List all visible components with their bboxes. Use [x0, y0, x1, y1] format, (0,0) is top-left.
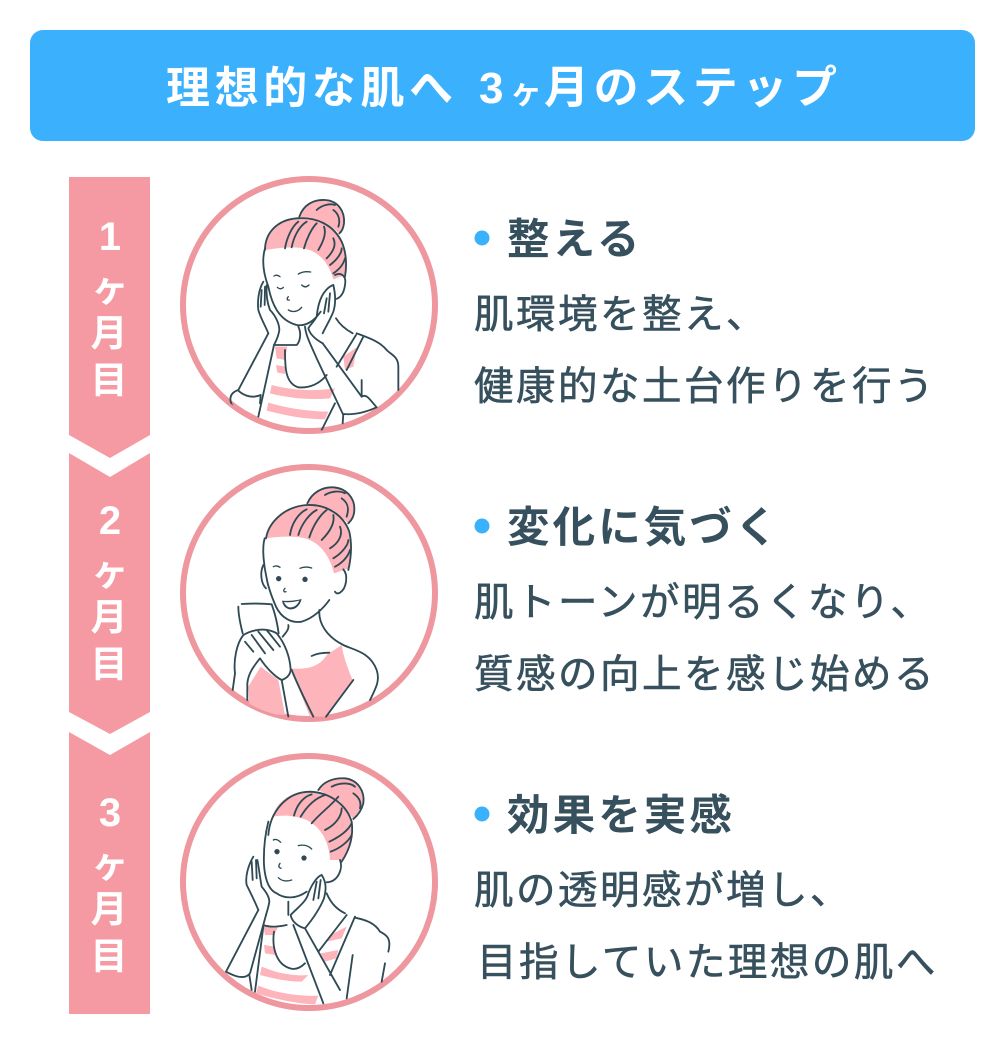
title text: 月のステップ [544, 62, 842, 113]
bullet [474, 230, 490, 246]
timeline arrow: month 3: 月 [90, 889, 128, 930]
timeline arrow: month 1: ヶ [92, 268, 128, 309]
timeline arrow: month 1: 1 [99, 215, 121, 259]
description: 肌環境を整え、 [474, 293, 768, 337]
description: 肌トーンが明るくなり、 [474, 581, 932, 625]
illustration: woman smiling at smartphone [183, 467, 435, 719]
bullet [474, 806, 490, 822]
illustration: woman with eyes closed touching cheeks [183, 179, 435, 431]
timeline arrow: month 2: 月 [90, 597, 128, 638]
timeline arrow: month 2 [69, 453, 150, 734]
timeline arrow: month 3: 目 [90, 936, 128, 977]
timeline arrow: month 2: ヶ [92, 552, 128, 593]
title text: 理想的な肌へ [166, 64, 458, 113]
timeline arrow: month 1 [69, 177, 150, 458]
heading: 変化に気づく [507, 505, 781, 552]
timeline arrow: month 3 [69, 732, 150, 1014]
description: 肌の透明感が増し、 [474, 869, 852, 913]
title text: 3 [479, 64, 508, 113]
timeline arrow: month 3: ヶ [92, 844, 128, 885]
bullet [474, 518, 490, 534]
heading: 整える [507, 217, 643, 264]
title banner [30, 30, 975, 141]
description: 目指していた理想の肌へ [477, 941, 938, 985]
step 1 text [474, 217, 936, 409]
timeline arrow: month 1: 目 [90, 360, 128, 401]
timeline arrow: month 3: 3 [99, 791, 121, 835]
title text: ヶ [510, 74, 547, 110]
heading: 効果を実感 [507, 793, 735, 840]
timeline arrow: month 1: 月 [90, 313, 128, 354]
description: 質感の向上を感じ始める [474, 653, 936, 697]
timeline arrow: month 2: 目 [90, 644, 128, 685]
description: 健康的な土台作りを行う [474, 365, 936, 409]
illustration: woman looking forward touching cheeks [183, 756, 435, 1008]
step 2 text [474, 505, 936, 697]
timeline arrow: month 2: 2 [99, 499, 121, 543]
step 3 text [474, 793, 938, 985]
